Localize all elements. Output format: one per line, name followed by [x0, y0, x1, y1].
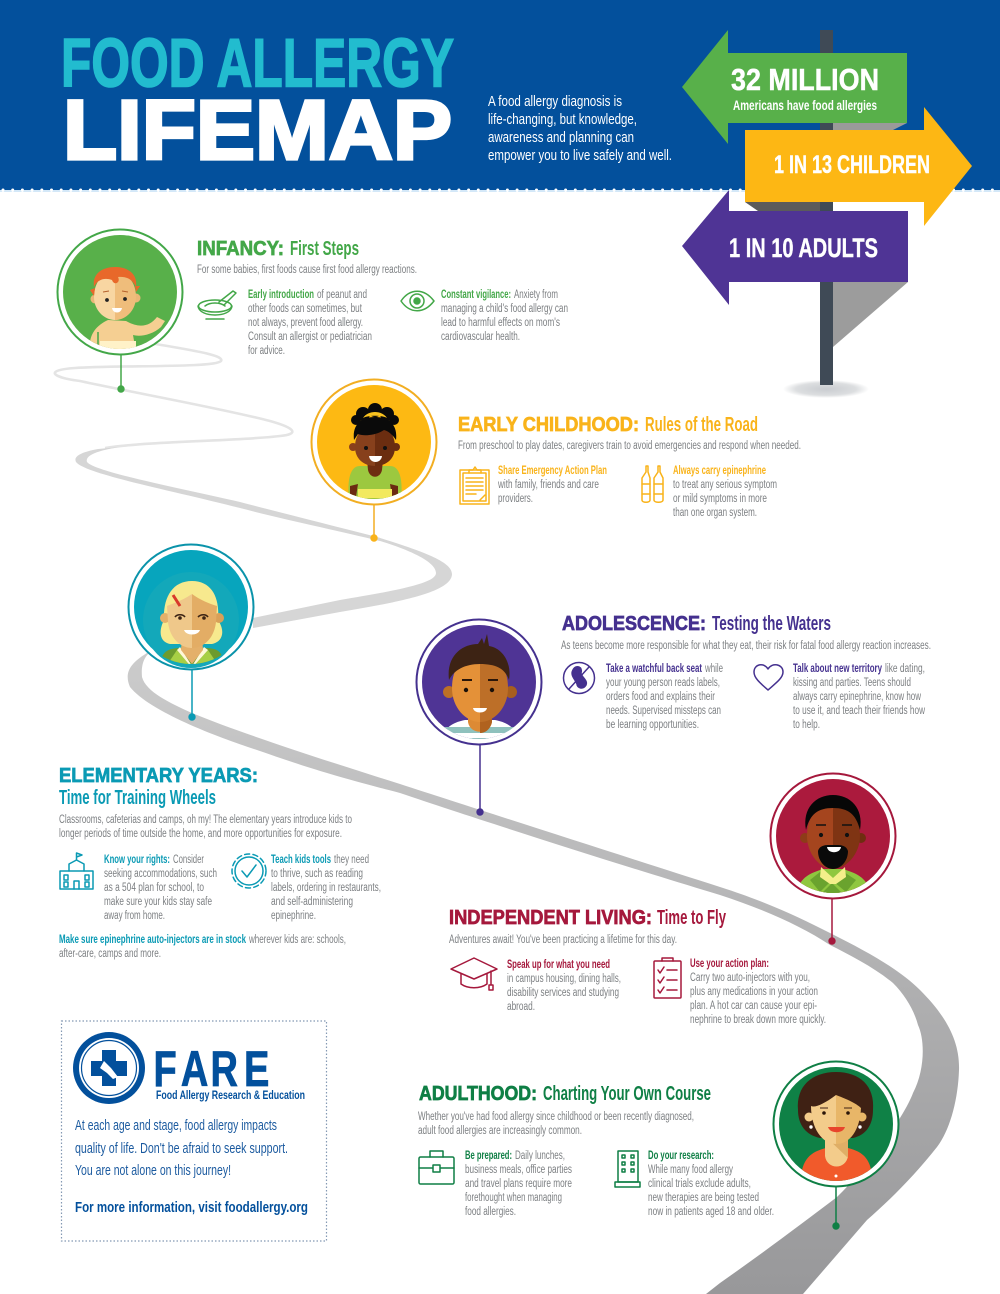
heading: First Steps: [290, 238, 359, 260]
text: speak up: Speak up for what you need: [507, 959, 610, 971]
marker line and dot: [476, 745, 484, 816]
intro text: longer periods of time outside the home, and more opportunities for exposure.: [59, 828, 342, 840]
marker line and dot: [828, 899, 836, 945]
text: take a watchful back seat: orders food and explains their: [606, 691, 715, 703]
title: FOOD ALLERGY: [61, 24, 454, 102]
text: talk about new territory: kissing and parties. Teens should: [793, 677, 911, 689]
text: know your rights: away from home.: [104, 910, 165, 922]
subtitle: For some babies, first foods cause first food allergy reactions.: [197, 264, 417, 276]
intro text: awareness and planning can: [488, 130, 634, 146]
text: use your action plan: plan. A hot car can cause your epi-: [690, 1000, 817, 1012]
intro text: [418, 1111, 694, 1137]
support message: At each age and stage, food allergy impacts: [75, 1117, 277, 1134]
icon: bowl: [198, 291, 236, 319]
intro text: life-changing, but knowledge,: [488, 112, 637, 128]
icon: checklist: [654, 958, 681, 998]
panel: early childhood: [312, 380, 801, 542]
intro text: [488, 94, 672, 164]
text: be prepared: Be prepared:: [465, 1150, 512, 1162]
text: know your rights: Know your rights:: [104, 854, 170, 866]
heading: ELEMENTARY YEARS:: [59, 765, 258, 787]
icon: clipboard: [460, 467, 489, 504]
text: early introduction: not always, prevent food allergy.: [248, 317, 363, 329]
text: do your research: now in patients aged 18 and older.: [648, 1206, 774, 1218]
support message: quality of life. Don't be afraid to seek support.: [75, 1140, 288, 1157]
intro text: Classrooms, cafeterias and camps, oh my! The elementary years introduce kids to: [59, 814, 352, 826]
panel: independent living: [449, 774, 896, 1026]
yellow arrow: 1 in 13 children: [745, 107, 972, 226]
post: [820, 30, 833, 385]
text: speak up: abroad.: [507, 1001, 535, 1013]
ground shadow: [783, 380, 869, 398]
text: know your rights: make sure your kids stay safe: [104, 896, 212, 908]
text: take a watchful back seat: needs. Supervised missteps can: [606, 705, 721, 717]
text: use your action plan: Carry two auto-injectors with you,: [690, 972, 810, 984]
intro text: Whether you've had food allergy since childhood or been recently diagnosed,: [418, 1111, 694, 1123]
text: know your rights: [104, 854, 217, 922]
intro text: empower you to live safely and well.: [488, 148, 672, 164]
portrait: bearded man: [770, 774, 896, 900]
text: talk about new territory: to use it, and teach their friends how: [793, 705, 925, 717]
website link text: For more information, visit foodallergy.org: [75, 1200, 308, 1216]
panel: FARE information box: [62, 1021, 326, 1241]
text: constant vigilance: Anxiety from: [514, 289, 558, 301]
marker line and dot: [188, 670, 196, 721]
heading: INFANCY:: [197, 238, 284, 260]
text: use your action plan: Use your action plan:: [690, 958, 769, 970]
heading: ADOLESCENCE:: [562, 613, 706, 635]
heading: [562, 613, 831, 635]
icon: eye: [401, 291, 434, 311]
text: share emergency action plan: providers.: [498, 493, 533, 505]
text: do your research: Do your research:: [648, 1150, 714, 1162]
heading: [419, 1083, 711, 1105]
text: be prepared: food allergies.: [465, 1206, 516, 1218]
text: early introduction: other foods can sometimes, but: [248, 303, 363, 315]
text: early introduction: for advice.: [248, 345, 285, 357]
text: be prepared: and travel plans require more: [465, 1178, 572, 1190]
title: [61, 24, 454, 177]
panel: elementary years: [59, 544, 381, 960]
portrait: boy: [416, 620, 542, 744]
header banner: [0, 0, 1000, 191]
text: early introduction: [248, 289, 372, 357]
text: constant vigilance: cardiovascular health.: [441, 331, 520, 343]
text: share emergency action plan: with family, friends and care: [497, 479, 599, 491]
text: be prepared: [465, 1150, 572, 1218]
text: take a watchful back seat: [606, 663, 723, 731]
text: auto-injectors note: Make sure epinephrine auto-injectors are in stock: [59, 934, 246, 946]
text: know your rights: seeking accommodations, such: [104, 868, 217, 880]
icon: school: [60, 853, 93, 889]
signpost: [682, 30, 972, 398]
text: teach kids tools: labels, ordering in restaurants,: [271, 882, 381, 894]
icon: hospital building: [615, 1151, 640, 1187]
text: take a watchful back seat: your young person reads labels,: [606, 677, 720, 689]
icon: FARE logo: [73, 1032, 145, 1104]
text: be prepared: Daily lunches,: [515, 1150, 565, 1162]
title: LIFEMAP: [63, 83, 452, 177]
icon: gear with check: [232, 854, 266, 888]
FARE wordmark: FARE: [154, 1042, 269, 1097]
text: teach kids tools: they need: [334, 854, 369, 866]
green arrow: 32 million: Americans have food allergies: [733, 98, 877, 113]
heading: Rules of the Road: [645, 414, 758, 436]
intro text: A food allergy diagnosis is: [488, 94, 622, 110]
text: auto-injectors note: [59, 934, 346, 960]
heading: Time to Fly: [657, 907, 727, 929]
heading: EARLY CHILDHOOD:: [458, 414, 639, 436]
text: always carry epinephrine: Always carry epinephrine: [673, 465, 766, 477]
heading: Testing the Waters: [712, 613, 831, 635]
text: use your action plan: plus any medications in your action: [690, 986, 818, 998]
text: teach kids tools: epinephrine.: [271, 910, 316, 922]
support message: You are not alone on this journey!: [75, 1162, 231, 1179]
text: do your research: [648, 1150, 774, 1218]
text: teach kids tools: and self-administering: [271, 896, 353, 908]
support message: [75, 1117, 288, 1179]
subtitle: Adventures await! You've been practicing a lifetime for this day.: [449, 934, 677, 946]
text: teach kids tools: Teach kids tools: [271, 854, 331, 866]
heading: Time for Training Wheels: [59, 787, 216, 809]
panel: adolescence: [416, 613, 931, 816]
yellow arrow: 1 in 13 children: 1 IN 13 CHILDREN: [774, 151, 930, 179]
text: know your rights: Consider: [173, 854, 204, 866]
text: use your action plan: nephrine to break down more quickly.: [690, 1014, 826, 1026]
text: speak up: in campus housing, dining halls,: [507, 973, 621, 985]
portrait: blonde girl: [128, 544, 254, 670]
text: constant vigilance: [441, 289, 568, 343]
marker line and dot: [370, 505, 378, 542]
text: take a watchful back seat: Take a watchful back seat: [606, 663, 702, 675]
text: take a watchful back seat: be learning opportunities.: [606, 719, 699, 731]
marker line and dot: [117, 354, 125, 393]
text: do your research: new therapies are being tested: [648, 1192, 759, 1204]
sign shadows: [745, 123, 908, 347]
panel: infancy: [58, 230, 568, 393]
icon: epinephrine injectors: [642, 466, 663, 502]
text: auto-injectors note: wherever kids are: schools,: [248, 934, 346, 946]
text: speak up: [507, 959, 621, 1013]
text: early introduction: of peanut and: [317, 289, 367, 301]
heading: [59, 765, 258, 809]
text: know your rights: as a 504 plan for school, to: [104, 882, 204, 894]
text: do your research: clinical trials exclude adults,: [648, 1178, 751, 1190]
text: teach kids tools: to thrive, such as reading: [271, 868, 363, 880]
portrait: girl with buns: [312, 380, 436, 504]
text: always carry epinephrine: or mild symptoms in more: [673, 493, 767, 505]
text: share emergency action plan: Share Emergency Action Plan: [498, 465, 607, 477]
purple arrow: 1 in 10 adults: [682, 190, 908, 305]
text: talk about new territory: to help.: [793, 719, 820, 731]
portrait: woman: [774, 1062, 898, 1186]
heading: [458, 414, 758, 436]
panel: adulthood: [418, 1062, 898, 1230]
portrait: baby: [58, 230, 182, 355]
text: talk about new territory: like dating,: [885, 663, 925, 675]
heading: ADULTHOOD:: [419, 1083, 537, 1105]
marker line and dot: [832, 1187, 840, 1230]
icon: briefcase: [419, 1151, 454, 1184]
intro text: [59, 814, 352, 840]
text: early introduction: Early introduction: [248, 289, 314, 301]
heading: INDEPENDENT LIVING:: [449, 907, 652, 929]
text: always carry epinephrine: to treat any serious symptom: [673, 479, 777, 491]
green arrow: 32 million: 32 MILLION: [731, 62, 879, 97]
purple arrow: 1 in 10 adults: 1 IN 10 ADULTS: [729, 233, 878, 263]
text: constant vigilance: Constant vigilance:: [441, 289, 511, 301]
text: talk about new territory: always carry epinephrine, know how: [793, 691, 921, 703]
text: be prepared: business meals, office parties: [465, 1164, 572, 1176]
text: talk about new territory: [793, 663, 925, 731]
FARE wordmark: Food Allergy Research & Education: [156, 1090, 305, 1102]
heading: Charting Your Own Course: [543, 1083, 711, 1105]
heading: [197, 238, 359, 260]
text: share emergency action plan: [497, 465, 607, 505]
text: always carry epinephrine: [673, 465, 777, 519]
text: constant vigilance: lead to harmful effects on mom's: [441, 317, 560, 329]
green arrow: 32 million: [682, 30, 907, 144]
road path: [55, 343, 959, 1294]
icon: crossed-out peanut: [564, 662, 594, 694]
text: teach kids tools: [271, 854, 381, 922]
subtitle: From preschool to play dates, caregivers train to avoid emergencies and respond when needed.: [458, 440, 801, 452]
text: be prepared: forethought when managing: [465, 1192, 562, 1204]
text: speak up: disability services and studying: [507, 987, 619, 999]
text: always carry epinephrine: than one organ system.: [673, 507, 757, 519]
intro text: adult food allergies are increasingly common.: [418, 1125, 582, 1137]
text: constant vigilance: managing a child's food allergy can: [441, 303, 568, 315]
text: take a watchful back seat: while: [704, 663, 723, 675]
text: auto-injectors note: after-care, camps and more.: [59, 948, 161, 960]
text: use your action plan: [690, 958, 826, 1026]
text: early introduction: Consult an allergist or pediatrician: [248, 331, 372, 343]
icon: graduation cap: [451, 958, 497, 990]
text: talk about new territory: Talk about new territory: [793, 663, 882, 675]
text: do your research: While many food allergy: [648, 1164, 733, 1176]
icon: heart: [754, 665, 783, 690]
